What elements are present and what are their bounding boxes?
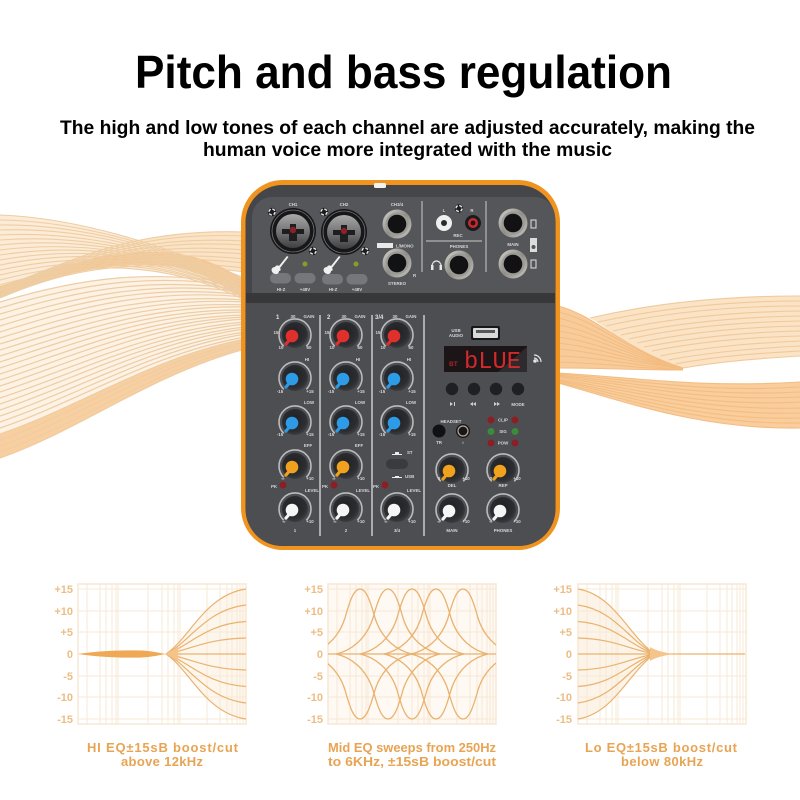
Mid EQ caption <box>328 740 497 769</box>
channel strip 2: 10 <box>330 345 335 350</box>
transport buttons <box>446 383 525 407</box>
hi knob <box>279 362 311 391</box>
Lo EQ caption: below 80kHz <box>621 754 704 769</box>
Mid EQ curves <box>328 588 496 720</box>
HI EQ axis labels: -10 <box>57 692 73 704</box>
channel strip 1: +15 <box>306 389 314 394</box>
channel strip 1: 15 <box>274 330 279 335</box>
PHONES knob: +10 <box>513 519 521 524</box>
chart: Mid EQ <box>304 584 515 769</box>
DEL knob: +10 <box>462 476 470 481</box>
divider strip <box>246 293 555 303</box>
HI EQ curves <box>78 589 246 719</box>
channel strip 3/4: +15 <box>408 432 416 437</box>
transport buttons: MODE <box>511 402 525 407</box>
channel strip 1: LOW <box>304 400 315 405</box>
headset jacks: TR <box>436 440 443 445</box>
Lo EQ axis labels: 0 <box>566 649 572 661</box>
eff knob <box>330 450 362 479</box>
status LEDs: SIG <box>499 429 507 434</box>
REP knob: +10 <box>513 476 521 481</box>
channel strip 1: EFF <box>304 443 312 448</box>
HI EQ caption: HI EQ±15sB boost/cut <box>87 740 239 755</box>
ST/USB switch <box>386 450 414 479</box>
channel strip 2: GAIN <box>355 314 365 319</box>
channel strip 1: 60 <box>307 345 312 350</box>
DEL knob: DEL <box>448 483 457 488</box>
Lo EQ axis labels <box>553 584 572 726</box>
channel strip 2: HI <box>356 357 360 362</box>
channel strip 2: LOW <box>355 400 366 405</box>
level knob <box>330 493 362 522</box>
channel strip 3/4: -15 <box>379 432 386 437</box>
ST/USB switch: USB <box>405 474 414 479</box>
low knob <box>381 406 413 435</box>
channel strip 2 <box>322 314 370 533</box>
eff knob <box>279 450 311 479</box>
status LEDs: POW <box>498 440 509 446</box>
main jacks <box>498 208 537 278</box>
icon: wireless <box>534 355 541 362</box>
REC RCA sockets: REC <box>453 233 463 238</box>
Lo EQ axis labels: -10 <box>556 692 572 704</box>
subtitle: The high and low tones of each channel are adjusted accurately, making the <box>60 118 755 139</box>
Mid EQ axis labels: +5 <box>310 627 323 639</box>
LED display: BT <box>449 361 458 368</box>
status LEDs: CLIP <box>498 418 508 422</box>
channel strip 2: ∞ <box>333 519 337 524</box>
HI EQ axis labels: +5 <box>60 627 73 639</box>
channel strip 2: 2 <box>327 315 331 321</box>
REP knob <box>487 454 521 488</box>
CH3/4 jacks <box>377 202 417 286</box>
title: Pitch and bass regulation <box>135 46 672 98</box>
REC RCA sockets: R <box>470 208 474 213</box>
REC RCA sockets: L <box>443 208 446 213</box>
channel strip 1: -15 <box>277 432 284 437</box>
channel strip 1: +15 <box>306 432 314 437</box>
XLR input CH2 <box>320 202 369 255</box>
Mid EQ caption: Mid EQ sweeps from 250Hz <box>328 740 496 755</box>
subtitle: human voice more integrated with the music <box>203 140 612 161</box>
control panel <box>246 303 555 546</box>
low knob <box>279 406 311 435</box>
channel strip 1: LEVEL <box>305 488 319 493</box>
CH3/4 jacks: CH3/4 <box>391 202 404 207</box>
USB port <box>449 326 500 340</box>
channel strip 2: -15 <box>328 389 335 394</box>
Mid EQ axis labels <box>304 584 323 726</box>
USB port: AUDIO <box>449 333 464 338</box>
DEL knob <box>436 454 470 488</box>
channel strip 3/4: 15 <box>376 330 381 335</box>
subtitle <box>60 118 755 161</box>
channel strip 3/4: PK <box>373 484 380 489</box>
PHONES knob: PHONES <box>494 528 512 533</box>
channel strip 1: 1 <box>276 315 280 321</box>
USB port: USB <box>451 328 461 333</box>
channel strip 3/4: 3/4 <box>394 528 401 533</box>
headset jacks <box>432 419 470 445</box>
channel strip 1: ∞ <box>281 476 285 481</box>
channel strip 1: +10 <box>306 519 314 524</box>
channel strip 3/4: 3/4 <box>375 315 384 321</box>
low knob <box>330 406 362 435</box>
channel strip 3/4: GAIN <box>406 314 416 319</box>
channel strip 1: ∞ <box>282 519 286 524</box>
HI EQ axis labels: +10 <box>54 606 73 618</box>
connector panel <box>252 183 555 293</box>
channel strip 2: 15 <box>325 330 330 335</box>
channel strip 2: +10 <box>357 519 365 524</box>
DEL knob: 0 <box>438 476 441 481</box>
sound waves: left <box>0 215 245 458</box>
mixer body <box>241 180 560 550</box>
HI EQ axis labels: +15 <box>54 584 73 596</box>
Mid EQ axis labels: -10 <box>307 692 323 704</box>
audio mixer <box>241 180 560 550</box>
HI EQ caption: above 12kHz <box>121 754 204 769</box>
mixer body inner <box>246 185 556 546</box>
MAIN knob: +10 <box>462 519 470 524</box>
channel strip 2: ∞ <box>332 476 336 481</box>
XLR input CH1 <box>268 202 317 255</box>
headset jacks: HEADSET <box>441 419 462 424</box>
gain knob <box>330 319 362 348</box>
channel strip 3/4: 30 <box>393 314 398 319</box>
channel strip 3/4: LOW <box>406 400 417 405</box>
HI EQ axis labels <box>54 584 73 726</box>
HI EQ axis labels: -15 <box>57 714 73 726</box>
channel strip 1: 30 <box>291 314 296 319</box>
channel strip 2: PK <box>322 484 329 489</box>
channel strip 3/4: +15 <box>408 389 416 394</box>
Mid EQ caption: to 6KHz, ±15sB boost/cut <box>328 754 497 769</box>
level knob <box>381 493 413 522</box>
XLR input CH2: CH2 <box>340 202 349 207</box>
chart: Lo EQ <box>553 584 746 769</box>
channel strip 1: +10 <box>306 476 314 481</box>
XLR input CH1: CH1 <box>289 202 298 207</box>
channel strip 1: HI <box>305 357 309 362</box>
PHONES knob: ∞ <box>489 519 493 524</box>
phones jack: PHONES <box>450 244 468 249</box>
Lo EQ curves <box>578 589 745 719</box>
hi knob <box>330 362 362 391</box>
Lo EQ caption <box>585 740 738 769</box>
REP knob: 0 <box>490 476 493 481</box>
channel strip 3/4: 10 <box>381 345 386 350</box>
LED display <box>444 346 527 376</box>
MAIN knob <box>436 494 470 533</box>
status LEDs <box>488 416 518 446</box>
REC RCA sockets <box>436 204 481 238</box>
ST/USB switch: ST <box>407 450 413 455</box>
channel strip 2: 30 <box>342 314 347 319</box>
headset jacks: ∩ <box>461 440 465 445</box>
LED display: bLUE <box>464 349 521 376</box>
channel strip 3/4: LEVEL <box>407 488 421 493</box>
channel strip 2: -15 <box>328 432 335 437</box>
channel strip 3/4: 60 <box>409 345 414 350</box>
CH3/4 jacks: STEREO <box>388 281 407 286</box>
channel strip 2: +15 <box>357 432 365 437</box>
Mid EQ axis labels: +10 <box>304 606 323 618</box>
main jacks: MAIN <box>507 242 519 247</box>
Lo EQ caption: Lo EQ±15sB boost/cut <box>585 740 738 755</box>
Lo EQ axis labels: -15 <box>556 714 572 726</box>
channel strip 3/4 <box>373 314 421 533</box>
sound waves: right <box>558 296 800 428</box>
Mid EQ axis labels: +15 <box>304 584 323 596</box>
channel strip 2: EFF <box>355 443 363 448</box>
input buttons: HI-Z <box>277 287 286 292</box>
channel strip 2: 60 <box>358 345 363 350</box>
channel strip 3/4: +10 <box>408 519 416 524</box>
Mid EQ axis labels: 0 <box>317 649 323 661</box>
channel strip 2: LEVEL <box>356 488 370 493</box>
Lo EQ axis labels: +10 <box>553 606 572 618</box>
chart: HI EQ <box>54 584 246 769</box>
gain knob <box>381 319 413 348</box>
phones jack <box>431 244 474 280</box>
input buttons: +48V <box>300 287 310 292</box>
channel strip 1: 1 <box>294 528 297 533</box>
MAIN knob: MAIN <box>446 528 458 533</box>
input buttons <box>270 256 368 292</box>
Mid EQ axis labels: -15 <box>307 714 323 726</box>
channel strip 1 <box>271 314 319 533</box>
gain knob <box>279 319 311 348</box>
channel strip 1: 10 <box>279 345 284 350</box>
level knob <box>279 493 311 522</box>
channel strip 1: -15 <box>277 389 284 394</box>
Mid EQ axis labels: -5 <box>313 671 323 683</box>
channel strip 2: +15 <box>357 389 365 394</box>
channel strip 2: 2 <box>345 528 348 533</box>
channel strip 3/4: -15 <box>379 389 386 394</box>
Lo EQ axis labels: +5 <box>559 627 572 639</box>
Lo EQ axis labels: -5 <box>562 671 572 683</box>
HI EQ axis labels: 0 <box>67 649 73 661</box>
MAIN knob: ∞ <box>437 519 441 524</box>
HI EQ axis labels: -5 <box>63 671 73 683</box>
input buttons: HI-Z <box>329 287 338 292</box>
channel strip 1: PK <box>271 484 278 489</box>
HI EQ caption <box>87 740 239 769</box>
channel strip 2: +10 <box>357 476 365 481</box>
input buttons: +48V <box>352 287 362 292</box>
REP knob: REP <box>498 483 508 488</box>
channel strip 3/4: HI <box>407 357 411 362</box>
PHONES knob <box>487 494 521 533</box>
channel strip 1: GAIN <box>304 314 314 319</box>
CH3/4 jacks: L/MONO <box>396 244 414 248</box>
Lo EQ axis labels: +15 <box>553 584 572 596</box>
hi knob <box>381 362 413 391</box>
channel strip 3/4: ∞ <box>384 519 388 524</box>
CH3/4 jacks: R <box>413 273 417 278</box>
